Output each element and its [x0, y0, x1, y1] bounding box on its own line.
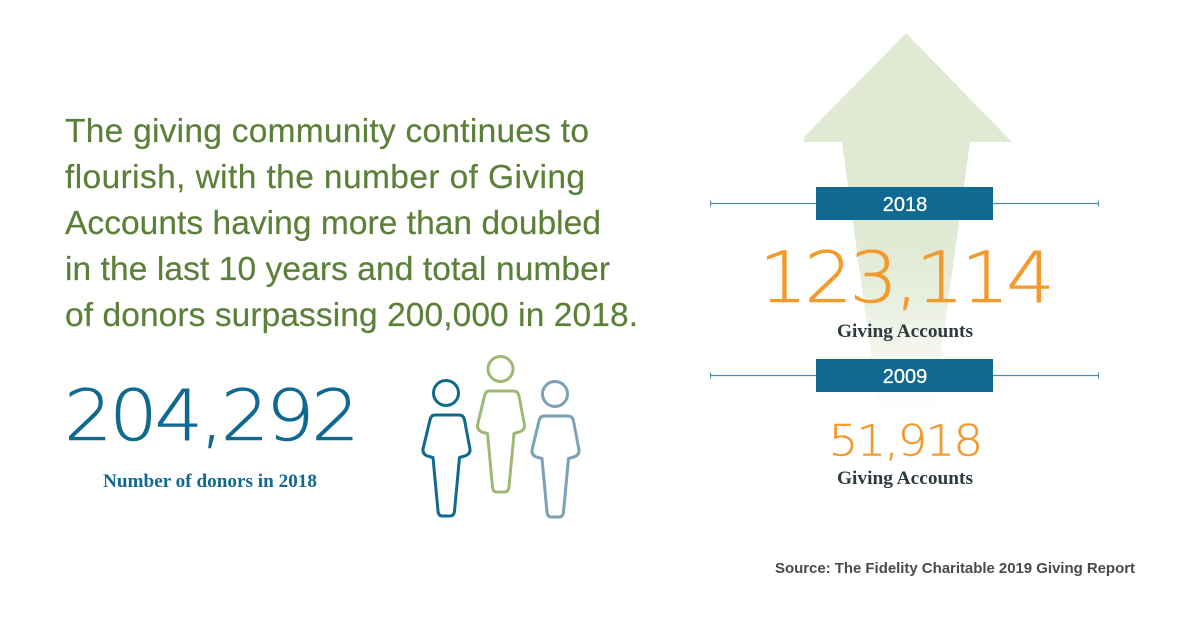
donor count caption: Number of donors in 2018 [103, 471, 317, 492]
headline text: The giving community continues to [65, 113, 589, 150]
icon: three people [423, 356, 579, 517]
headline text: of donors surpassing 200,000 in 2018. [65, 297, 638, 334]
headline text: Accounts having more than doubled [65, 205, 601, 242]
timeline marker 2009: 2009 [883, 366, 927, 388]
source note: Source: The Fidelity Charitable 2019 Giving Report [775, 560, 1135, 577]
headline text [65, 113, 638, 334]
donor count number: 204,292 [64, 376, 357, 457]
headline text: flourish, with the number of Giving [65, 159, 585, 196]
2009 accounts number: 51,918 [828, 415, 981, 466]
timeline marker 2018: 2018 [883, 194, 927, 216]
2018 accounts caption: Giving Accounts [837, 321, 973, 342]
icon: person grey-blue [532, 382, 579, 517]
arrow: growth arrow [804, 33, 1012, 412]
headline text: in the last 10 years and total number [65, 251, 610, 288]
timeline marker 2018 [710, 187, 1099, 220]
icon: person green [477, 356, 525, 492]
icon: person blue [423, 380, 470, 516]
2009 accounts caption: Giving Accounts [837, 468, 973, 489]
timeline marker 2009 [710, 359, 1099, 392]
2018 accounts number: 123,114 [759, 238, 1052, 319]
